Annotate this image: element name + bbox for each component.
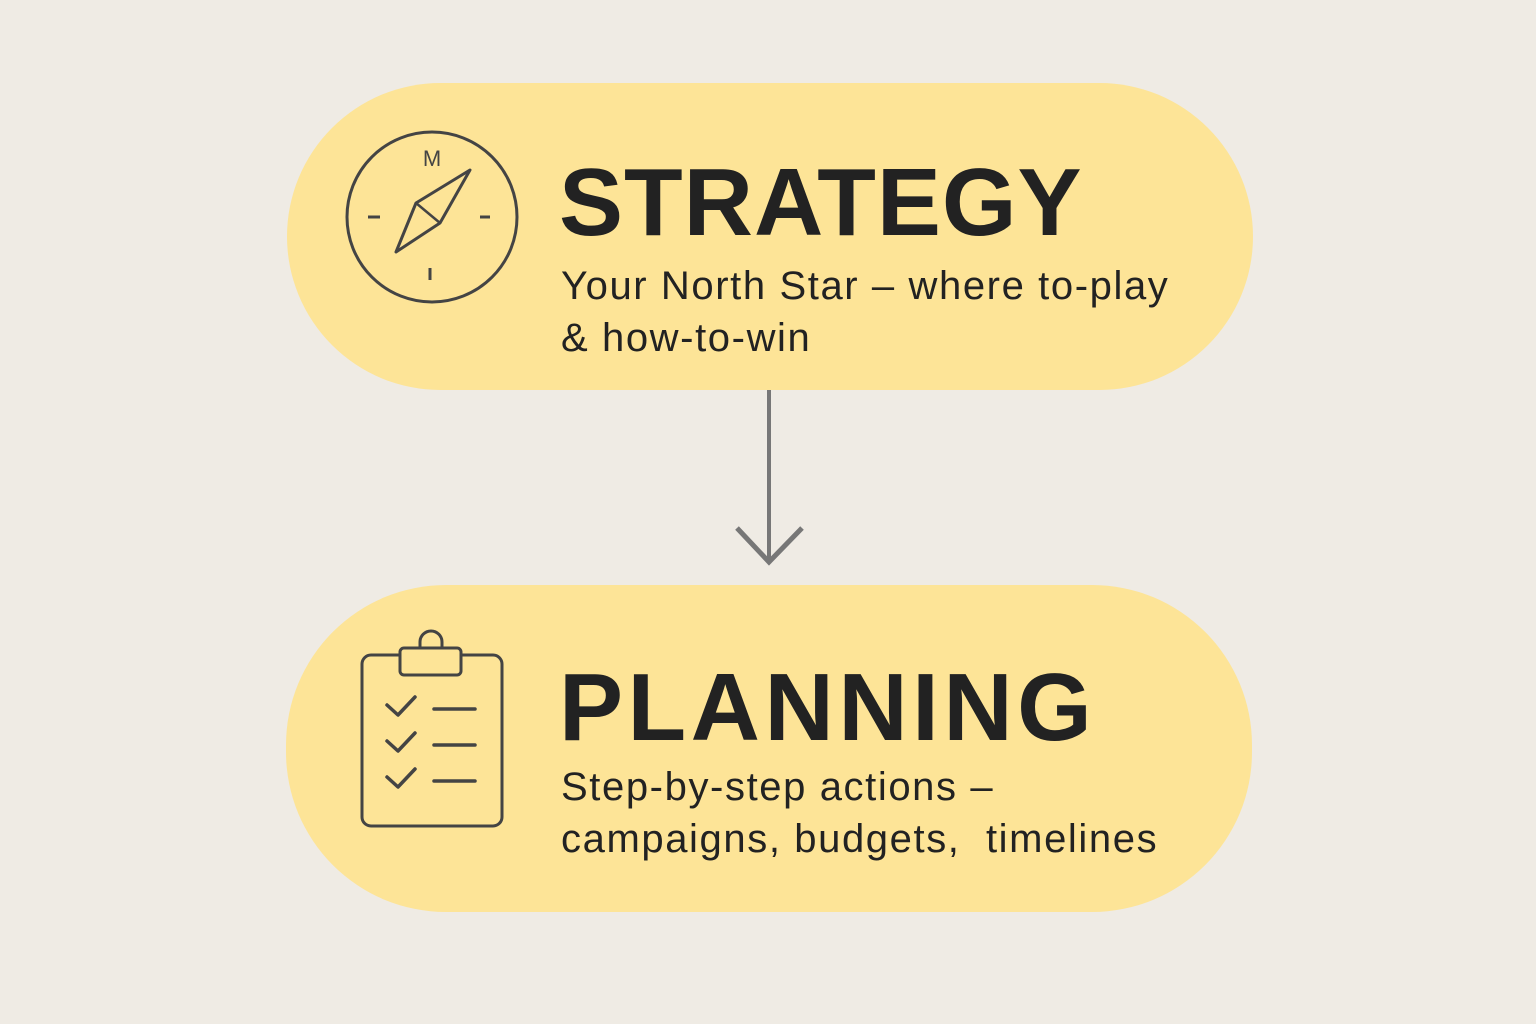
- panel: strategy: [287, 83, 1253, 390]
- heading: strategy: STRATEGY: [559, 149, 1083, 256]
- text: strategy description: Your North Star – where to-play: [561, 264, 1169, 308]
- text: planning description: [561, 765, 1158, 861]
- text: planning description: Step-by-step actions –: [561, 765, 994, 809]
- icon: compass: [346, 130, 518, 304]
- text: strategy description: & how-to-win: [561, 316, 811, 360]
- icon: compass: M: [423, 146, 441, 171]
- text: planning description: campaigns, budgets, timelines: [561, 817, 1158, 861]
- panel: planning: [286, 585, 1252, 912]
- icon: clipboard: [360, 630, 504, 828]
- arrow: strategy to planning: [735, 390, 804, 566]
- text: strategy description: [561, 264, 1169, 360]
- heading: planning: PLANNING: [559, 654, 1096, 761]
